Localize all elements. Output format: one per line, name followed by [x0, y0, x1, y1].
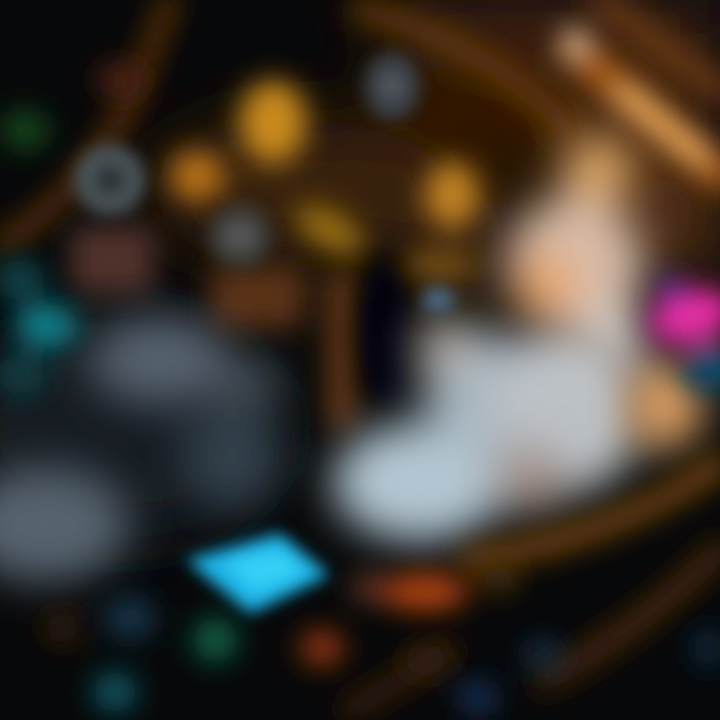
bottom right beams	[350, 465, 720, 710]
teal lights	[0, 260, 79, 393]
dark vertical gap	[361, 250, 409, 410]
gauges	[74, 52, 420, 268]
green light	[1, 110, 49, 150]
magenta and blue shape	[643, 277, 720, 390]
grey clouds: left	[0, 316, 284, 583]
machine columns	[70, 225, 359, 430]
small red glow	[96, 62, 144, 98]
cool backdrop: lower left	[0, 320, 280, 540]
small bottom lights	[44, 596, 720, 715]
peach glow in cloud	[505, 134, 705, 451]
white cloud mass	[332, 317, 643, 542]
blue dot above cloud	[422, 287, 454, 313]
warm backdrop: upper area	[150, 0, 720, 300]
orange red glow	[300, 564, 518, 666]
amber lights	[169, 80, 480, 280]
glowing orange streak	[560, 27, 720, 175]
diagonal beams: top	[0, 0, 720, 245]
cyan screen	[186, 533, 330, 614]
